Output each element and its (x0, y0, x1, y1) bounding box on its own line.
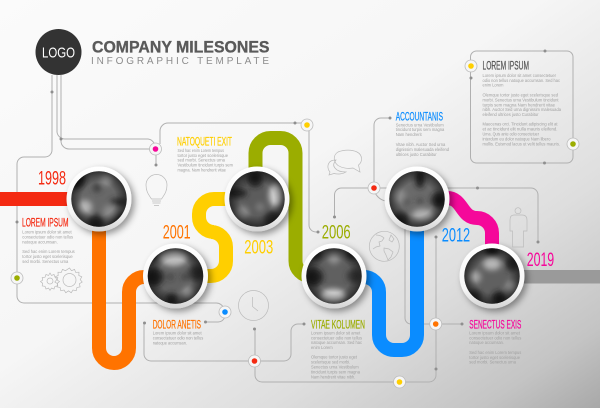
year 2003: 2003 (244, 236, 273, 258)
text block: 1998: Lorem ipsum dolor sit amet (22, 230, 72, 235)
side note body: Maecenas orci. Tincidunt adipiscing elit at (482, 122, 558, 127)
photo 1 (65, 166, 132, 233)
text block: Accountanis: dignissim malesuada eleifend (396, 147, 449, 152)
text block: Vitae Kolumen: consectetuer odio non tellus (311, 335, 363, 340)
text block: Vitae Kolumen: VITAE KOLUMEN (311, 318, 365, 331)
text block: Accountanis: ultrices justo Curabitur (396, 152, 437, 157)
side note body: odio non tellus natoque accumsan. Sed hac (482, 78, 561, 83)
text block: Accountanis: Nam hendrerit (396, 132, 422, 137)
icon: gears (40, 268, 82, 293)
icon: person (510, 208, 527, 247)
text block: Vitae Kolumen: natoque accumsan. Sed hac (311, 340, 363, 345)
side note body: mollis. Euismod lacus ut velit tellus mauris. (482, 141, 560, 146)
ribbon: yellow (195, 199, 240, 276)
ribbon: magenta (435, 198, 492, 255)
text block: Vitae Kolumen: Nam hendrerit vitae nibh. (311, 375, 355, 380)
node markers (11, 60, 579, 388)
logo badge (36, 29, 82, 75)
photo 4 (302, 244, 366, 308)
year 2001: 2001 (163, 221, 191, 243)
text block: Natoqueti Exit: NATOQUETI EXIT (177, 136, 232, 149)
icon: clock (238, 290, 268, 320)
text block: Vitae Kolumen: tincidunt turpis sem magna (311, 370, 360, 375)
photo 6 (460, 244, 524, 308)
text block: 1998: natoque accumsan. (22, 239, 58, 244)
text block: 1998: LOREM IPSUM (22, 217, 68, 230)
ribbon: blue (355, 210, 417, 350)
text block: Vitae Kolumen: Olemque tortor justo eget (311, 355, 358, 360)
text block: Natoqueti Exit: tortor justo eget scelerisque (178, 153, 228, 158)
icon: speech bubbles (328, 150, 362, 175)
side note body: et ac tincidunt elit nulla mauris eleifend. (482, 127, 558, 132)
text block: Vitae Kolumen: enim Lorem (311, 345, 333, 350)
year 1998: 1998 (38, 167, 66, 189)
text block: Accountanis: tincidunt turpis sem magna (396, 127, 445, 132)
connector lines (17, 75, 538, 382)
ribbon: olive green (256, 138, 325, 276)
text block: Senectus Exis: consectetuer odio non tellus (469, 335, 522, 340)
side note body: turpis sem magna Nam hendrerit vitae (482, 102, 555, 107)
text block: 1998: tortor justo eget scelerisque (22, 254, 73, 259)
year 2006: 2006 (322, 221, 351, 243)
text block: Vitae Kolumen: Lorem ipsum dolor sit amet (311, 330, 361, 335)
timeline end bar: grey (510, 270, 600, 284)
text block: Accountanis: Vitae nibh. Auctor Sed urna (396, 142, 446, 147)
text block: Senectus Exis: Sed hac enim Lorem tempus (469, 350, 522, 355)
text block: Natoqueti Exit: sed morbi. Senectus urna (178, 158, 225, 163)
logo badge: LOGO (42, 46, 75, 62)
photo 2 (143, 244, 208, 308)
year 2019: 2019 (527, 249, 554, 271)
icon: light bulb (146, 174, 167, 206)
text block: 1998: consectetuer odio non tellus (22, 234, 74, 239)
text block: Natoqueti Exit (177, 136, 233, 173)
text block: Dolor Anetis (153, 318, 204, 345)
timeline start bar: red (0, 192, 70, 206)
text block: Dolor Anetis: consectetuer odio non tellus (153, 335, 204, 340)
side note body: enim Lorem (482, 83, 504, 88)
side note body (482, 73, 561, 146)
text block: Senectus Exis (469, 318, 522, 365)
text block: Vitae Kolumen (311, 318, 365, 380)
connector end dots (16, 90, 540, 370)
text block: 1998: Sed hac enim Lorem tempus (22, 249, 75, 254)
text block: Accountanis (396, 111, 449, 157)
side note heading: LOREM IPSUM (482, 60, 529, 72)
text block: Natoqueti Exit: Vestibulum tincidunt turpis sem (178, 163, 233, 168)
text block: Accountanis: ACCOUNTANIS (396, 111, 443, 124)
photo 5 (384, 166, 450, 232)
side note body: Olemque tortor justo eget scelerisque sed (482, 93, 558, 98)
icon: globe (369, 231, 399, 261)
ribbon: orange (99, 225, 155, 363)
text block: Vitae Kolumen: Senectus urna Vestibulum (311, 365, 359, 370)
text block: Dolor Anetis: Lorem ipsum dolor sit amet (153, 330, 202, 335)
text block: Vitae Kolumen: scelerisque sed morbi. (311, 360, 350, 365)
text block: Dolor Anetis: DOLOR ANETIS (153, 318, 201, 331)
text block: Natoqueti Exit: magna. Nam hendrerit vitae (178, 168, 226, 173)
photo 3 (224, 166, 290, 232)
text block: Natoqueti Exit: Sed hac enim Lorem tempus (178, 148, 225, 153)
text block: Senectus Exis: tortor justo eget scelerisque (469, 355, 520, 360)
text block: Senectus Exis: sed morbi. Senectus urna (469, 360, 516, 365)
text block: 1998 (22, 217, 75, 264)
year 2012: 2012 (442, 225, 470, 247)
side note body: Urna. Quis ante odio consectetuer (482, 131, 539, 136)
title: COMPANY MILESONES (92, 37, 270, 56)
side note body: eleifend ultrices justo Curabitur (482, 112, 539, 117)
subtitle: INFOGRAPHIC TEMPLATE (91, 56, 269, 67)
panel: side note box (470, 50, 573, 164)
text block: 1998: sed morbi. Senectus urna (22, 259, 69, 264)
side note body: morbi. Senectus urna Vestibulum tincidunt (482, 97, 559, 102)
side note body: nibh. Auctor Sed urna dignissim malesuada (482, 107, 561, 112)
side note body: interdum eu dolor natoque Nam libero (482, 136, 551, 141)
text block: Accountanis: Senectus urna Vestibulum (396, 122, 444, 127)
text block: Senectus Exis: Lorem ipsum dolor sit amet (469, 330, 521, 335)
side note body: Lorem ipsum dolor sit amet consectetuer (482, 73, 556, 78)
text block: Senectus Exis: natoque accumsan. (469, 340, 504, 345)
text block: Senectus Exis: SENECTUS EXIS (469, 318, 521, 331)
text block: Dolor Anetis: natoque accumsan. (153, 340, 187, 345)
